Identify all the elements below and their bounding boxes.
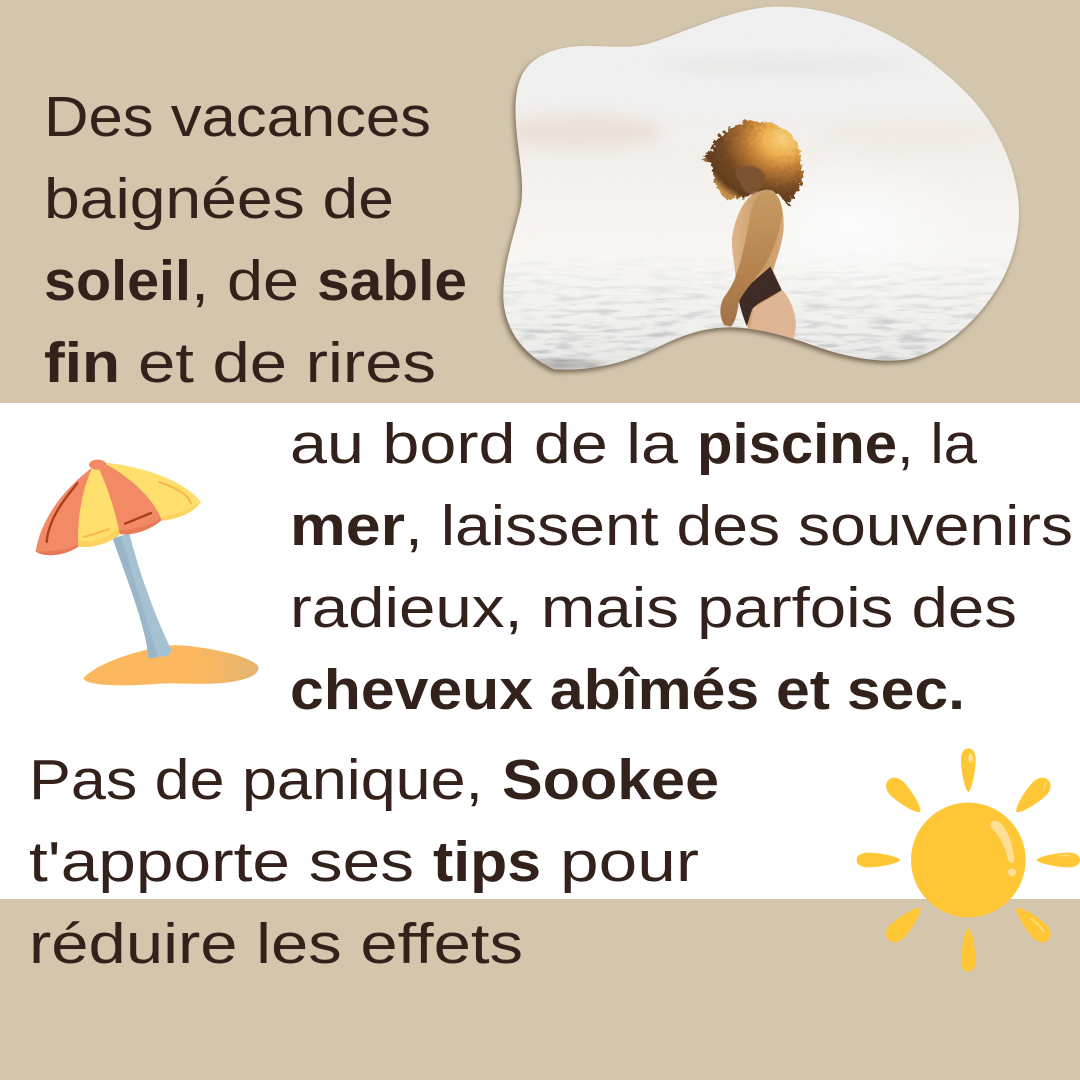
photo: woman at the beach in blob shape bbox=[498, 6, 1021, 376]
text: middle paragraph: cheveux abîmés et sec. bbox=[290, 658, 965, 722]
text: middle paragraph: radieux, mais parfois des bbox=[290, 576, 1017, 640]
icon: beach umbrella on sand bbox=[36, 460, 260, 687]
icon: sun bbox=[857, 748, 1080, 972]
text: intro paragraph: sable bbox=[317, 249, 467, 313]
text: middle paragraph: au bord de la bbox=[290, 412, 678, 476]
face bbox=[735, 166, 765, 195]
text: middle paragraph bbox=[290, 412, 1073, 722]
text: intro paragraph: baignées de bbox=[44, 167, 394, 231]
text: closing paragraph: pour bbox=[560, 830, 699, 894]
arm bbox=[720, 189, 782, 327]
text: closing paragraph: Pas de panique, bbox=[29, 748, 483, 812]
hair bbox=[702, 121, 803, 205]
swimsuit bbox=[738, 267, 782, 326]
text: intro paragraph: fin bbox=[44, 331, 120, 395]
text: closing paragraph: réduire les effets bbox=[29, 912, 523, 976]
text: middle paragraph: , la bbox=[897, 412, 977, 476]
text: closing paragraph: t'apporte ses bbox=[29, 830, 414, 894]
text: intro paragraph: soleil bbox=[44, 249, 191, 313]
text: closing paragraph bbox=[29, 748, 719, 976]
white band bbox=[0, 403, 1080, 899]
woman bbox=[702, 121, 803, 343]
thigh bbox=[750, 291, 796, 343]
text: closing paragraph: Sookee bbox=[502, 748, 719, 812]
text: intro paragraph: Des vacances bbox=[44, 85, 431, 149]
text: closing paragraph: tips bbox=[433, 830, 541, 894]
text: middle paragraph: piscine bbox=[697, 412, 897, 476]
text: middle paragraph: mer bbox=[290, 494, 405, 558]
torso and legs bbox=[732, 190, 796, 343]
text: intro paragraph bbox=[44, 85, 467, 395]
text: middle paragraph: , laissent des souvenirs bbox=[405, 494, 1073, 558]
text: intro paragraph: et de rires bbox=[138, 331, 436, 395]
text: intro paragraph: , de bbox=[191, 249, 299, 313]
